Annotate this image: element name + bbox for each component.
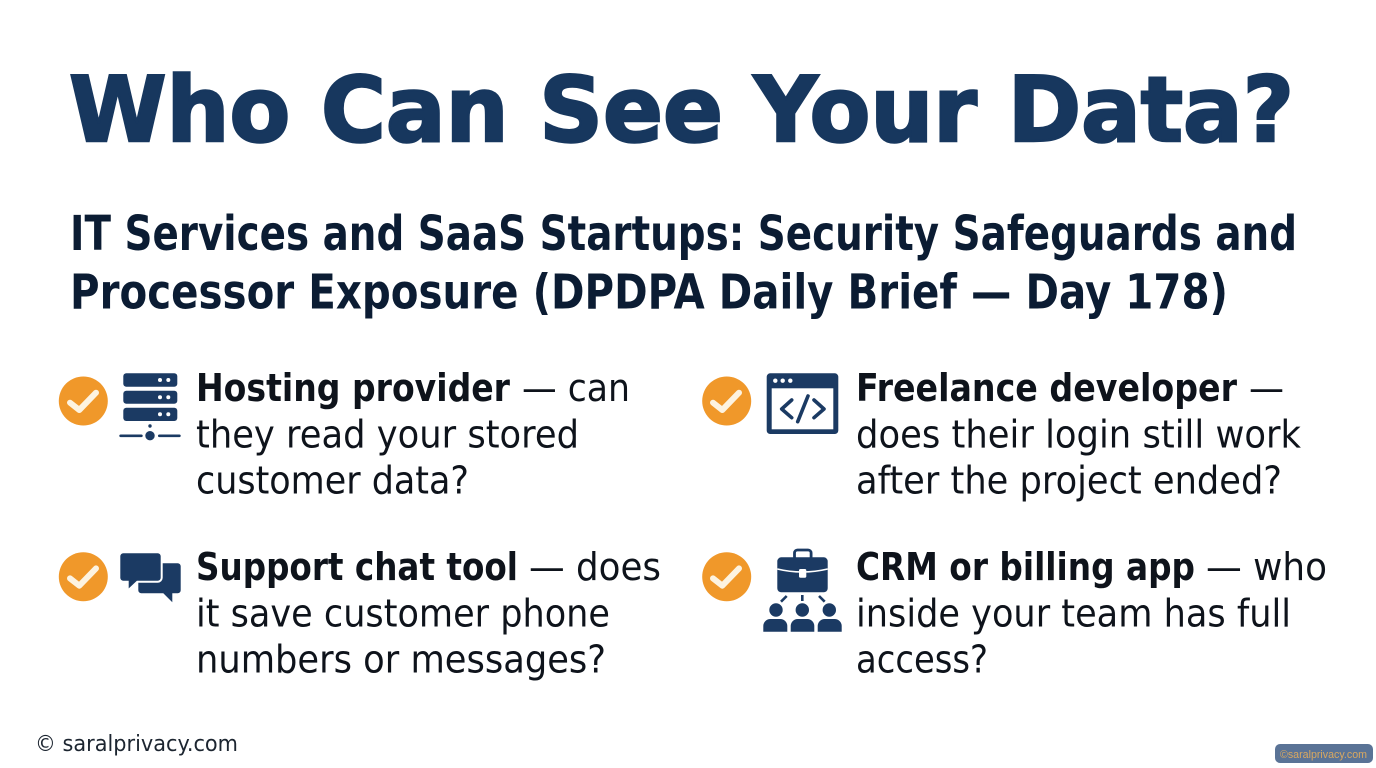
text: hosting provider: customer data? [196,458,469,502]
text: hosting provider: Hosting provider [196,366,510,410]
watermark badge [1275,744,1373,763]
text: support chat tool: Support chat tool [196,545,518,589]
text: crm or billing app: access? [856,638,988,682]
text: crm or billing app: CRM or billing app [856,545,1195,589]
panel: support chat tool [59,545,661,682]
text: crm or billing app [856,545,1327,682]
text: crm or billing app: inside your team has full [856,592,1291,636]
text: freelance developer: does their login still work [856,412,1301,456]
panel: crm or billing app [702,545,1327,682]
text: freelance developer: Freelance developer [856,366,1237,410]
text: support chat tool: it save customer phone [196,592,610,636]
icon: check badge [59,552,108,601]
panel: hosting provider [59,366,630,502]
icon: server rack [119,373,181,440]
text: freelance developer: — [1249,366,1284,410]
icon: briefcase and team [763,550,842,632]
icon: check badge [59,376,108,426]
icon: code window [767,373,838,434]
text: support chat tool: — does [529,545,661,589]
text: support chat tool [196,545,661,682]
footer copyright: © saralprivacy.com [35,732,238,757]
subtitle [70,206,1297,320]
text: hosting provider [196,366,630,502]
watermark badge: ©saralprivacy.com [1280,749,1367,761]
icon: check badge [702,552,751,601]
text: hosting provider: — can [522,366,630,410]
text: hosting provider: they read your stored [196,412,579,456]
text: freelance developer: after the project ended? [856,458,1282,502]
icon: chat bubbles [119,552,181,602]
icon: check badge [702,376,751,426]
text: support chat tool: numbers or messages? [196,638,606,682]
text: crm or billing app: — who [1206,545,1327,589]
text: freelance developer [856,366,1301,502]
title: Who Can See Your Data? [69,58,1294,163]
panel: freelance developer [702,366,1301,502]
